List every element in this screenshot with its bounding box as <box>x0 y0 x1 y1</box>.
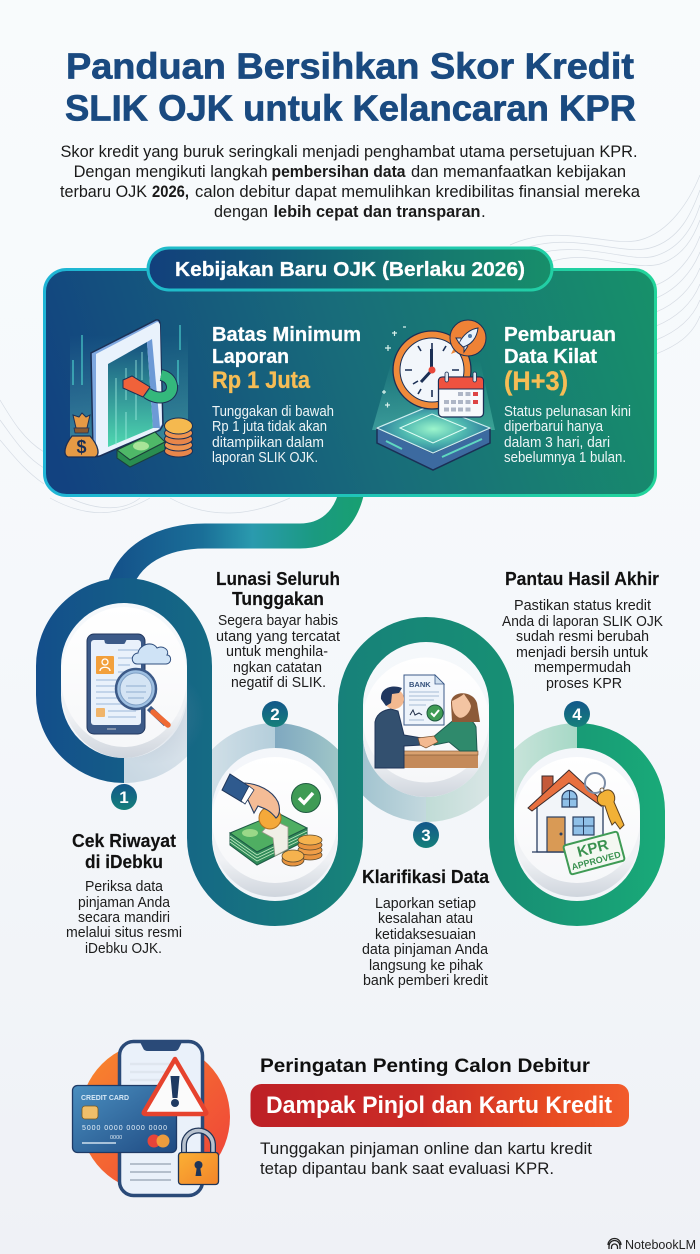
policy text: batas minimum: Batas Minimum <box>212 324 361 346</box>
step 1 text: Cek Riwayat <box>72 831 176 851</box>
step 4 text: proses KPR <box>546 675 622 692</box>
step 2 text: negatif di SLIK. <box>231 674 326 691</box>
warning icon: phone, credit card, alert and lock: 5000 0000 0000 0000 <box>82 1125 167 1132</box>
step 4 number <box>564 701 590 727</box>
icon: house with key and KPR approved stamp: KPR <box>575 836 610 861</box>
intro text: . <box>481 202 486 221</box>
intro text: calon debitur dapat memulihkan kredibilitas finansial mereka <box>195 182 641 201</box>
title: Panduan Bersihkan Skor Kredit <box>66 46 634 86</box>
step 1 text: secara mandiri <box>78 909 170 926</box>
step 1 text <box>66 831 182 957</box>
step 3 text <box>362 867 490 989</box>
step 3 text: ketidaksesuaian <box>375 926 476 943</box>
step 2 text: Tunggakan <box>232 589 324 609</box>
warning banner <box>250 1084 629 1127</box>
step 1 text: Periksa data <box>85 878 164 895</box>
intro text: Dengan mengikuti langkah <box>74 162 268 181</box>
warning banner: Dampak Pinjol dan Kartu Kredit <box>266 1092 612 1119</box>
icon: clock, calendar and data platform <box>372 320 495 470</box>
policy text: batas minimum: ditampiikan dalam <box>212 435 324 451</box>
warning description: Tunggakan pinjaman online dan kartu kredit <box>260 1139 592 1158</box>
intro text: Skor kredit yang buruk seringkali menjadi penghambat utama persetujuan KPR. <box>60 142 638 161</box>
notebooklm mark: NotebookLM <box>625 1238 696 1252</box>
step 1 text: di iDebku <box>85 852 163 872</box>
intro text: dengan <box>214 202 268 221</box>
intro text: 2026, <box>152 182 189 201</box>
icon: handshake at bank desk: BANK <box>409 680 431 689</box>
step 3 number <box>413 822 439 848</box>
policy text: pembaruan data kilat: Status pelunasan kini <box>504 404 631 420</box>
policy text: pembaruan data kilat: Data Kilat <box>504 346 597 368</box>
step 2 text: Segera bayar habis <box>218 612 338 629</box>
step 2 disc <box>212 757 338 897</box>
step 2 number: 2 <box>270 705 280 724</box>
warning description <box>260 1139 592 1178</box>
step 2 number <box>262 701 288 727</box>
step 2 text: Lunasi Seluruh <box>216 569 340 589</box>
step 1 text: pinjaman Anda <box>78 894 171 911</box>
step 1 number: 1 <box>119 788 129 807</box>
title: SLIK OJK untuk Kelancaran KPR <box>65 88 636 128</box>
step 1 disc <box>61 607 187 758</box>
panel: kebijakan baru OJK <box>44 248 656 496</box>
policy text: pembaruan data kilat: sebelumnya 1 bulan. <box>504 450 626 466</box>
policy text: batas minimum: Rp 1 Juta <box>212 367 311 394</box>
panel heading pill: Kebijakan Baru OJK (Berlaku 2026) <box>175 259 525 281</box>
policy text: pembaruan data kilat: Pembaruan <box>504 324 616 346</box>
icon: phone with magnifier and cloud <box>87 634 171 734</box>
warning icon: phone, credit card, alert and lock: 0000 <box>110 1135 122 1141</box>
policy text: batas minimum: laporan SLIK OJK. <box>212 450 318 466</box>
warning icon: phone, credit card, alert and lock <box>72 1042 230 1196</box>
step 2 text: utang yang tercatat <box>216 628 341 645</box>
step 4 text <box>502 569 663 692</box>
policy text: pembaruan data kilat: dalam 3 hari, dari <box>504 435 610 451</box>
step 2 text: ngkan catatan <box>233 659 322 676</box>
step 4: pantau hasil akhir <box>502 569 663 897</box>
intro text: terbaru OJK <box>60 182 148 201</box>
icon: hand paying coin onto cash <box>222 774 322 866</box>
step 2: lunasi tunggakan <box>212 569 341 897</box>
step 2 text <box>216 569 341 691</box>
policy text: batas minimum: Rp 1 juta tidak akan <box>212 419 327 435</box>
warning icon: phone, credit card, alert and lock: CREDIT CARD <box>81 1093 130 1102</box>
step 4 text: Pastikan status kredit <box>514 597 652 614</box>
step 3 text: kesalahan atau <box>378 910 473 927</box>
icon: handshake at bank desk <box>375 675 480 768</box>
step 4 disc <box>514 757 640 897</box>
step 4 text: menjadi bersih untuk <box>516 644 648 661</box>
warning text <box>250 1056 629 1178</box>
step 4 text: Anda di laporan SLIK OJK <box>502 613 663 630</box>
step 4 text: Pantau Hasil Akhir <box>505 569 659 589</box>
policy text: pembaruan data kilat <box>504 324 631 466</box>
step 3 text: bank pemberi kredit <box>363 972 489 989</box>
step 3 text: Laporkan setiap <box>375 895 476 912</box>
step 1 text: melalui situs resmi <box>66 924 182 941</box>
step 3 disc <box>363 658 489 797</box>
policy text: pembaruan data kilat: diperbarui hanya <box>504 419 604 435</box>
warning description: tetap dipantau bank saat evaluasi KPR. <box>260 1159 554 1178</box>
icon: phone portal with magnet and money: $ <box>76 437 87 457</box>
intro text: lebih cepat dan transparan <box>274 202 480 221</box>
intro text <box>60 142 641 221</box>
step 3 text: Klarifikasi Data <box>362 867 490 887</box>
step 3 text: data pinjaman Anda <box>362 941 489 958</box>
step 4 text: sudah resmi berubah <box>516 628 649 645</box>
winding path <box>48 590 652 914</box>
step 3: klarifikasi data <box>362 658 490 989</box>
icon: house with key and KPR approved stamp: APPROVED <box>570 849 622 872</box>
intro text: dan memanfaatkan kebijakan <box>411 162 626 181</box>
step 1 number <box>111 784 137 810</box>
step 4 text: mempermudah <box>534 659 631 676</box>
policy text: pembaruan data kilat: (H+3) <box>504 366 568 396</box>
panel heading pill <box>148 248 552 290</box>
step 2 text: untuk menghila- <box>226 643 328 660</box>
faded path arcs <box>124 695 577 811</box>
policy text: batas minimum: Tunggakan di bawah <box>212 404 334 420</box>
warning heading: Peringatan Penting Calon Debitur <box>260 1056 591 1077</box>
icon: phone portal with magnet and money <box>65 320 192 467</box>
step 3 number: 3 <box>421 826 431 845</box>
connector from panel to path <box>118 490 352 592</box>
policy text: batas minimum: Laporan <box>212 346 289 368</box>
step 3 text: langsung ke pihak <box>369 957 483 974</box>
icon: house with key and KPR approved stamp <box>528 770 625 875</box>
intro text: pembersihan data <box>272 162 406 181</box>
step 1: cek riwayat <box>61 607 205 957</box>
step 4 number: 4 <box>572 705 582 724</box>
title <box>65 46 636 128</box>
policy text: batas minimum <box>212 324 361 466</box>
step 1 text: iDebku OJK. <box>85 940 162 957</box>
